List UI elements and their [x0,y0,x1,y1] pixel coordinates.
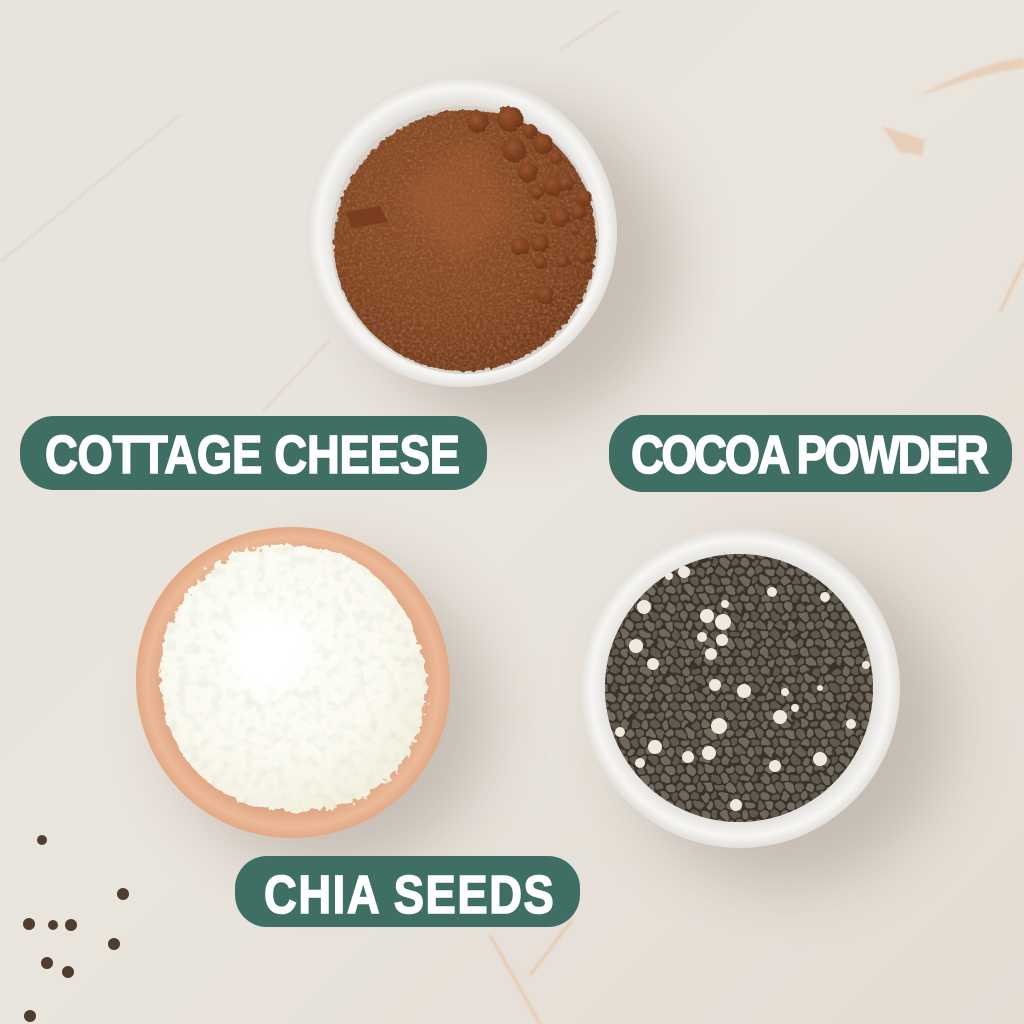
shadows under bowls [170,105,950,885]
cheese mound [161,546,427,812]
cocoa clumps [467,106,592,304]
label: cottage cheese: COTTAGE CHEESE [45,424,460,485]
chia bowl rim [580,528,900,848]
cocoa bowl rim [307,77,617,387]
label: chia seeds: CHIA SEEDS [264,864,554,925]
cheese texture [161,546,427,810]
chia seed texture [605,554,873,822]
scattered chia seeds [23,835,129,1022]
chia seed bed [605,554,873,822]
cocoa texture [330,105,600,375]
label: cocoa powder: COCOA POWDER [631,424,989,485]
bowl: chia seeds [580,528,900,848]
label: cocoa powder [609,415,1012,492]
bowl: cocoa powder [307,77,617,387]
white chia seeds [615,566,870,811]
bowl: cottage cheese [136,527,450,838]
terracotta bowl rim [136,527,450,838]
cocoa powder mound [334,110,596,371]
